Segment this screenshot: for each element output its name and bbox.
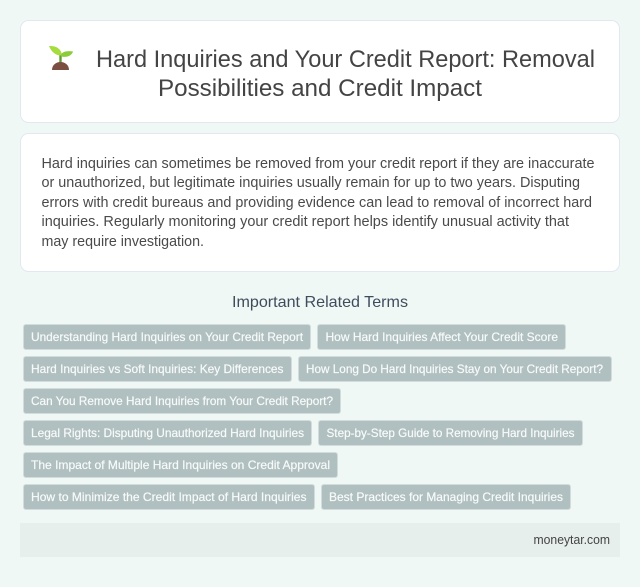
text block: summary: or unauthorized, but legitimate inquiries usually remain for up to two years. Disputing [42, 175, 580, 191]
footer [20, 523, 620, 557]
tag: impact of multiple [24, 452, 338, 478]
tag: hard vs soft: Hard Inquiries vs Soft Inquiries: Key Differences [31, 362, 284, 376]
text block: summary: errors with credit bureaus and providing evidence can lead to removal of incorrect hard [42, 195, 592, 211]
tag: legal rights: Legal Rights: Disputing Unauthorized Hard Inquiries [31, 426, 304, 440]
heading: important related terms: Important Related Terms [232, 294, 408, 311]
tag: how hard inquiries affect: How Hard Inquiries Affect Your Credit Score [326, 330, 558, 344]
tag: can you remove [24, 388, 340, 414]
tag: best practices: Best Practices for Managing Credit Inquiries [329, 490, 563, 504]
footer: moneytar.com [534, 533, 610, 547]
text block: summary [42, 156, 594, 250]
tag: hard vs soft [24, 356, 292, 382]
tag: step by step: Step-by-Step Guide to Removing Hard Inquiries [326, 426, 574, 440]
tag: how to minimize [24, 484, 314, 510]
text block: summary: inquiries. Regularly monitoring your credit report helps identify unusual activity that [42, 214, 569, 230]
tag: understanding hard inquiries: Understanding Hard Inquiries on Your Credit Report [31, 330, 304, 344]
title: Possibilities and Credit Impact [158, 75, 482, 102]
tag: best practices [322, 484, 570, 510]
icon: sprout [49, 46, 73, 70]
tag: understanding hard inquiries [24, 324, 310, 350]
panel: summary card [20, 134, 620, 272]
tag list [24, 324, 612, 510]
panel: title card [20, 20, 620, 122]
tag: impact of multiple: The Impact of Multiple Hard Inquiries on Credit Approval [31, 458, 330, 472]
text block: summary: may require investigation. [42, 234, 204, 250]
tag: can you remove: Can You Remove Hard Inquiries from Your Credit Report? [31, 394, 333, 408]
title: Hard Inquiries and Your Credit Report: Removal [96, 46, 595, 73]
tag: how long [298, 356, 612, 382]
tag: legal rights [24, 420, 312, 446]
tag: how to minimize: How to Minimize the Credit Impact of Hard Inquiries [31, 490, 306, 504]
tag: step by step [318, 420, 582, 446]
tag: how long: How Long Do Hard Inquiries Stay on Your Credit Report? [306, 362, 603, 376]
text block: summary: Hard inquiries can sometimes be removed from your credit report if they are inaccurate [42, 156, 594, 172]
tag: how hard inquiries affect [318, 324, 566, 350]
title [96, 46, 595, 102]
